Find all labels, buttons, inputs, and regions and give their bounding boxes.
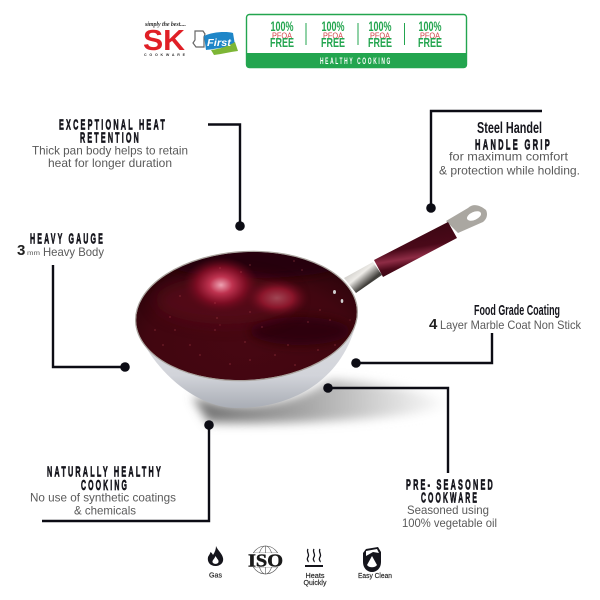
badge column 3 [368,18,392,50]
icon: heats quickly: Quickly [304,580,327,587]
callout text: heat for longer duration [48,156,172,170]
callout heading: EXCEPTIONAL HEAT [59,118,167,134]
callout heading: RETENTION [80,130,141,146]
callout heading: Steel Handel [477,120,542,137]
callout text: No use of synthetic coatings [30,490,176,504]
icon row [208,546,392,587]
callout: exceptional heat retention [32,118,245,231]
badge column 2: PFOA [323,32,344,40]
callout text [17,242,104,259]
callout heading: COOKING [81,478,129,494]
rivets [333,290,343,303]
icon: gas flame [208,546,223,580]
badge column 1: FREE [270,35,294,50]
callout text: & protection while holding. [439,164,580,178]
connector [323,383,448,473]
badge column 2 [321,18,345,50]
callout: naturally healthy cooking [30,420,214,521]
callout text: for maximum comfort [449,150,569,164]
callout text: 3 [17,242,25,259]
badge column 1: PFOA [272,32,293,40]
callout text: Seasoned using [407,503,489,517]
icon: easy clean [358,547,392,580]
icon: ISO: ISO [248,550,283,570]
callout text: Thick pan body helps to retain [32,144,188,158]
callout heading [59,118,167,146]
connector [351,333,492,368]
badge column 1: 100% [270,18,294,34]
callout heading: PRE- SEASONED [406,478,495,494]
callout text: & chemicals [74,504,136,518]
pan interior [136,252,357,380]
callout text [30,490,176,518]
pan shadow [192,380,450,423]
icon: heats quickly: Heats [306,573,325,580]
badge column 3: 100% [368,18,392,34]
badge band [246,53,467,68]
connector [426,111,542,213]
callout: food grade coating [351,302,582,368]
callout: steel handle grip [426,111,580,213]
badge column 4: PFOA [420,32,441,40]
callout heading: COOKWARE [421,490,479,506]
callout heading [47,464,163,494]
badge column 4: FREE [418,35,442,50]
icon: easy clean: Easy Clean [358,573,392,580]
callout text: Heavy Body [43,245,104,259]
callout text: mm [27,251,40,257]
callout heading [406,478,495,506]
badge: 100% PFOA free healthy cooking: HEALTHY COOKING [320,56,392,66]
logo: SK Cookware: SK [143,25,185,57]
icon: heats quickly [304,549,327,587]
badge column 2: FREE [321,35,345,50]
pan handle [344,205,487,293]
callout: naturally healthy cooking: NATURALLY HEALTHY [47,464,163,480]
badge column 3: PFOA [370,32,391,40]
icon: ISO [248,546,283,574]
callout text: 100% vegetable oil [402,516,497,530]
logo: SK Cookware: simply the best.... [144,22,186,28]
badge: 100% PFOA free healthy cooking [246,14,467,68]
badge column 4: 100% [418,18,442,34]
connector [42,420,214,521]
marble speckles [154,260,350,366]
callout text [32,144,188,170]
brand logos [143,22,238,57]
callout text: 4 [429,316,438,333]
callout: heavy gauge: HEAVY GAUGE [30,232,105,248]
pan rim [132,246,361,386]
connector [53,265,130,372]
callout: pre-seasoned cookware [323,383,497,530]
badge column 4 [418,18,442,50]
pan body [135,315,358,408]
callout text [402,503,497,530]
badge column 2: 100% [322,18,345,34]
callout: heavy gauge [17,232,130,372]
callout text [439,150,580,178]
connector [208,124,245,231]
logo: SK Cookware: COOKWARE [144,53,186,57]
wok pan [132,205,487,423]
badge column 3: FREE [368,35,392,50]
badge column 1 [270,18,294,50]
icon: gas flame: Gas [209,572,223,580]
callout text: Layer Marble Coat Non Stick [440,318,582,332]
logo: The First Choice: First [207,38,232,49]
